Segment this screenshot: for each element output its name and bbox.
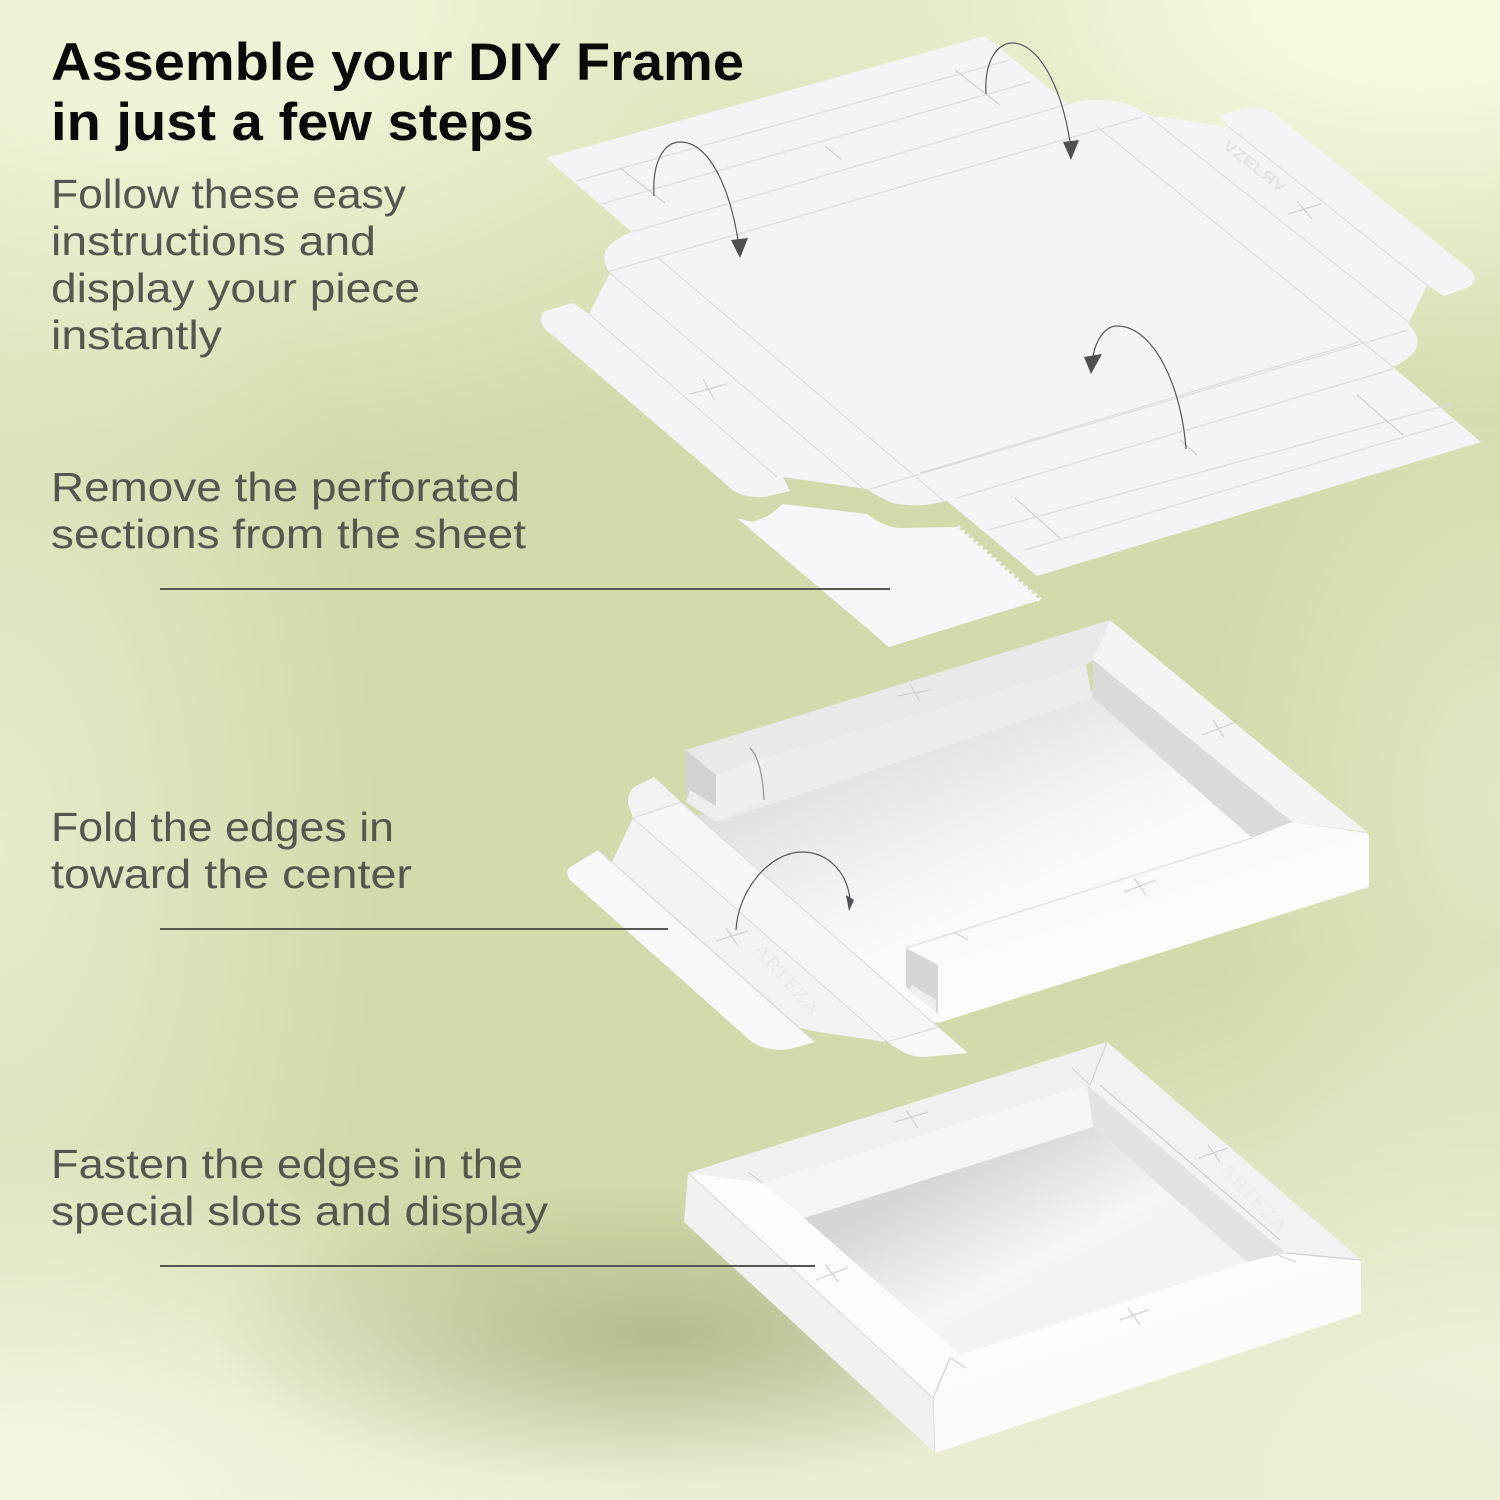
floor panel xyxy=(650,690,1292,1042)
step 1 illustration: flat sheet xyxy=(541,36,1481,576)
perforated section xyxy=(737,504,1040,647)
intro text: instantly xyxy=(51,312,223,358)
intro text: display your piece xyxy=(51,265,420,311)
step 3 text: Fasten the edges in the xyxy=(51,1141,523,1187)
step 3 illustration: finished frame xyxy=(684,1042,1361,1453)
arrow: bottom fold xyxy=(1084,326,1186,449)
arrow: top left fold xyxy=(654,142,748,258)
arrow: edge fold xyxy=(736,852,854,930)
corner creases and crosses xyxy=(816,1110,1228,1325)
step 3 text xyxy=(51,1141,549,1234)
step 2 text xyxy=(51,804,412,897)
intro text xyxy=(51,171,420,358)
step 3 leader line xyxy=(160,1265,815,1267)
outer walls xyxy=(684,1173,935,1453)
step 2 text: Fold the edges in xyxy=(51,804,394,850)
back tube xyxy=(686,620,1110,775)
step 3 text: special slots and display xyxy=(51,1188,549,1234)
embossed brand: ARTEZA xyxy=(748,939,824,1020)
right wall xyxy=(1093,620,1367,832)
right rim xyxy=(1087,1042,1361,1260)
step 1 text: sections from the sheet xyxy=(51,511,527,557)
registration crosses xyxy=(690,201,1321,399)
floor xyxy=(804,1127,1247,1355)
sheet body xyxy=(541,36,1481,576)
arrow: top right fold xyxy=(986,43,1079,160)
top rim xyxy=(688,1042,1361,1398)
inner back wall xyxy=(763,1085,1093,1218)
small top flap xyxy=(628,777,681,818)
intro text: instructions and xyxy=(51,218,376,264)
step 1 text: Remove the perforated xyxy=(51,464,520,510)
step 2 text: toward the center xyxy=(51,851,412,897)
step 1 text xyxy=(51,464,527,557)
fold lines and crosses xyxy=(598,802,938,1042)
title: Assemble your DIY Frame xyxy=(51,33,744,92)
bottom small flap xyxy=(887,1027,968,1057)
embossed brand: ARTEZA xyxy=(1214,1158,1293,1239)
registration crosses xyxy=(716,684,1236,946)
step 2 leader line xyxy=(160,928,668,930)
step 2 illustration: folding xyxy=(567,620,1369,1057)
embossed brand on tab: VZELЯV xyxy=(1220,137,1289,196)
title xyxy=(51,33,744,152)
left tab xyxy=(567,850,815,1050)
front tube xyxy=(906,822,1369,967)
fold lines xyxy=(576,60,1454,550)
inner right wall xyxy=(1087,1085,1286,1262)
step 1 leader line xyxy=(160,588,890,590)
left fold panel xyxy=(633,802,938,1042)
back rim xyxy=(688,1042,1107,1183)
title: in just a few steps xyxy=(51,93,534,152)
intro text: Follow these easy xyxy=(51,171,407,217)
